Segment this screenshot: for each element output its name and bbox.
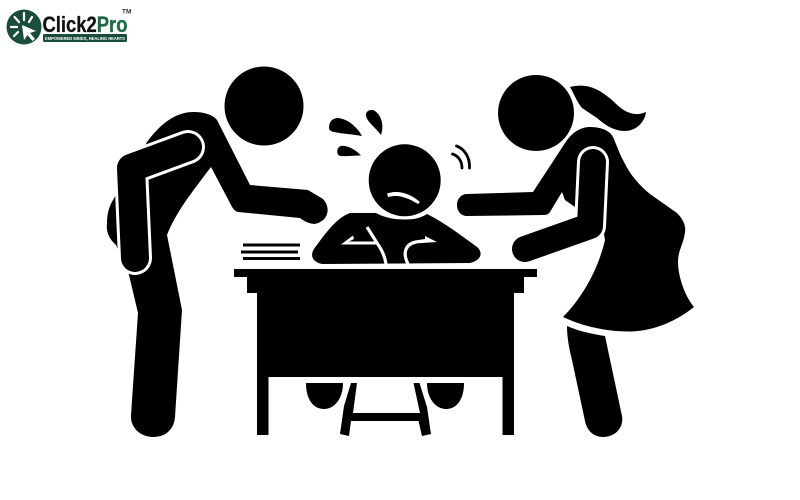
desk xyxy=(234,269,537,435)
sound wave marks xyxy=(452,146,470,168)
student torso and arms xyxy=(312,213,481,264)
woman ponytail xyxy=(570,86,646,131)
woman head xyxy=(498,75,574,151)
stack of papers xyxy=(241,244,300,260)
woman lower leg xyxy=(567,326,622,437)
chair xyxy=(340,383,431,436)
man body and pointing arm xyxy=(107,112,328,437)
logo tagline bar: EMPOWERED MINDS, HEALING HEARTS xyxy=(45,36,125,41)
stress drops xyxy=(329,110,382,156)
student knees xyxy=(306,383,464,409)
logo wordmark: Click2Pro xyxy=(42,12,128,37)
figure: man leaning over desk xyxy=(107,66,328,437)
figure: woman leaning over desk xyxy=(457,75,694,437)
trademark: TM xyxy=(122,8,131,16)
logo: Click2Pro xyxy=(6,8,131,44)
figure: student at desk xyxy=(312,144,481,264)
woman dress and pointing arm xyxy=(457,127,694,331)
student frown xyxy=(387,192,420,204)
student arm outlines xyxy=(341,227,437,264)
woman bent arm with white outline xyxy=(525,162,593,249)
man head xyxy=(224,66,304,146)
logo icon: cursor with rays xyxy=(6,10,42,44)
student head xyxy=(369,144,441,216)
man bent arm with white outline xyxy=(131,147,188,258)
